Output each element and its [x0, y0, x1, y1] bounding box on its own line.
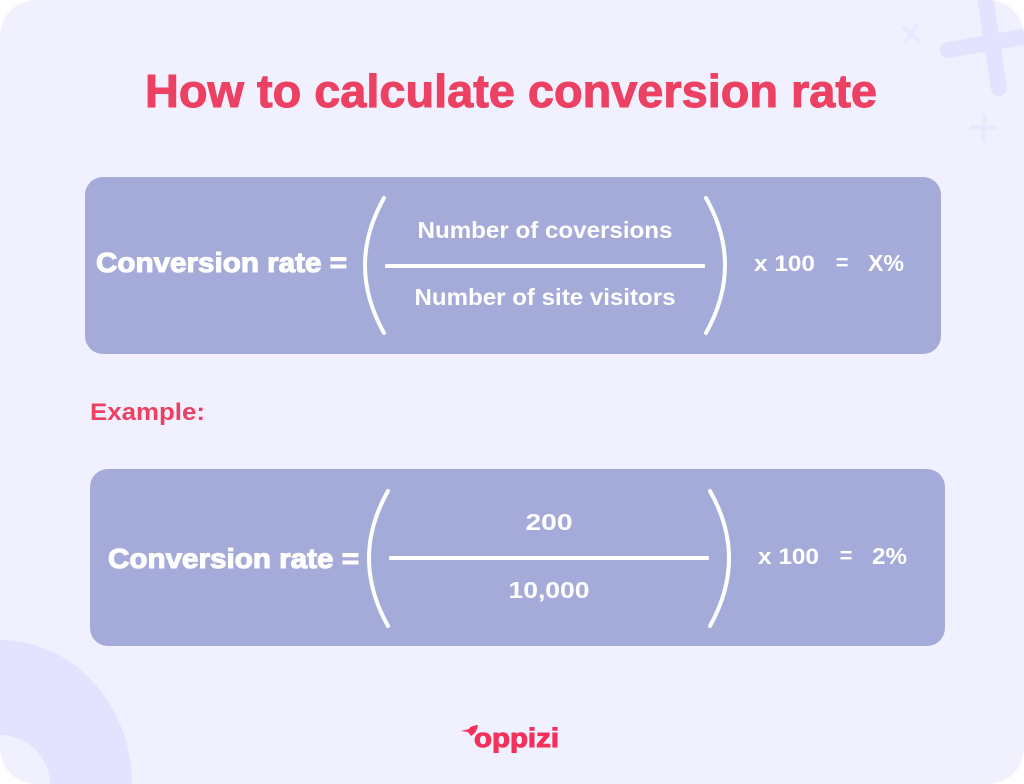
- panel: example: [90, 469, 945, 646]
- decorative arc bottom-left: [0, 640, 132, 784]
- formula label: Conversion rate =: [96, 247, 347, 278]
- left bracket: [369, 491, 388, 626]
- decorative small cross: [912, 35, 913, 36]
- denominator: Number of site visitors: [414, 284, 676, 310]
- equals: =: [836, 250, 848, 275]
- fraction line: [385, 264, 705, 268]
- result: 2%: [872, 543, 907, 569]
- fraction line: [389, 556, 709, 560]
- left bracket: [365, 198, 384, 333]
- example label: Example:: [90, 399, 205, 426]
- panel: formula: [85, 177, 941, 354]
- title: How to calculate conversion rate: [145, 65, 877, 117]
- denominator: 10,000: [508, 577, 590, 603]
- decorative large plus top-right: [948, 0, 1024, 88]
- example formula label: Conversion rate =: [108, 543, 359, 574]
- equals: =: [840, 543, 852, 568]
- right bracket: [706, 198, 725, 333]
- logo: oppizi: [461, 723, 559, 753]
- multiplier: x 100: [754, 251, 815, 276]
- right bracket: [710, 491, 729, 626]
- numerator: 200: [526, 509, 572, 535]
- result: X%: [868, 250, 904, 276]
- numerator: Number of coversions: [418, 217, 672, 243]
- logo wordmark: oppizi: [474, 723, 559, 753]
- icon: logo bird: [461, 725, 478, 736]
- multiplier: x 100: [758, 544, 819, 569]
- decorative small plus: [972, 116, 996, 140]
